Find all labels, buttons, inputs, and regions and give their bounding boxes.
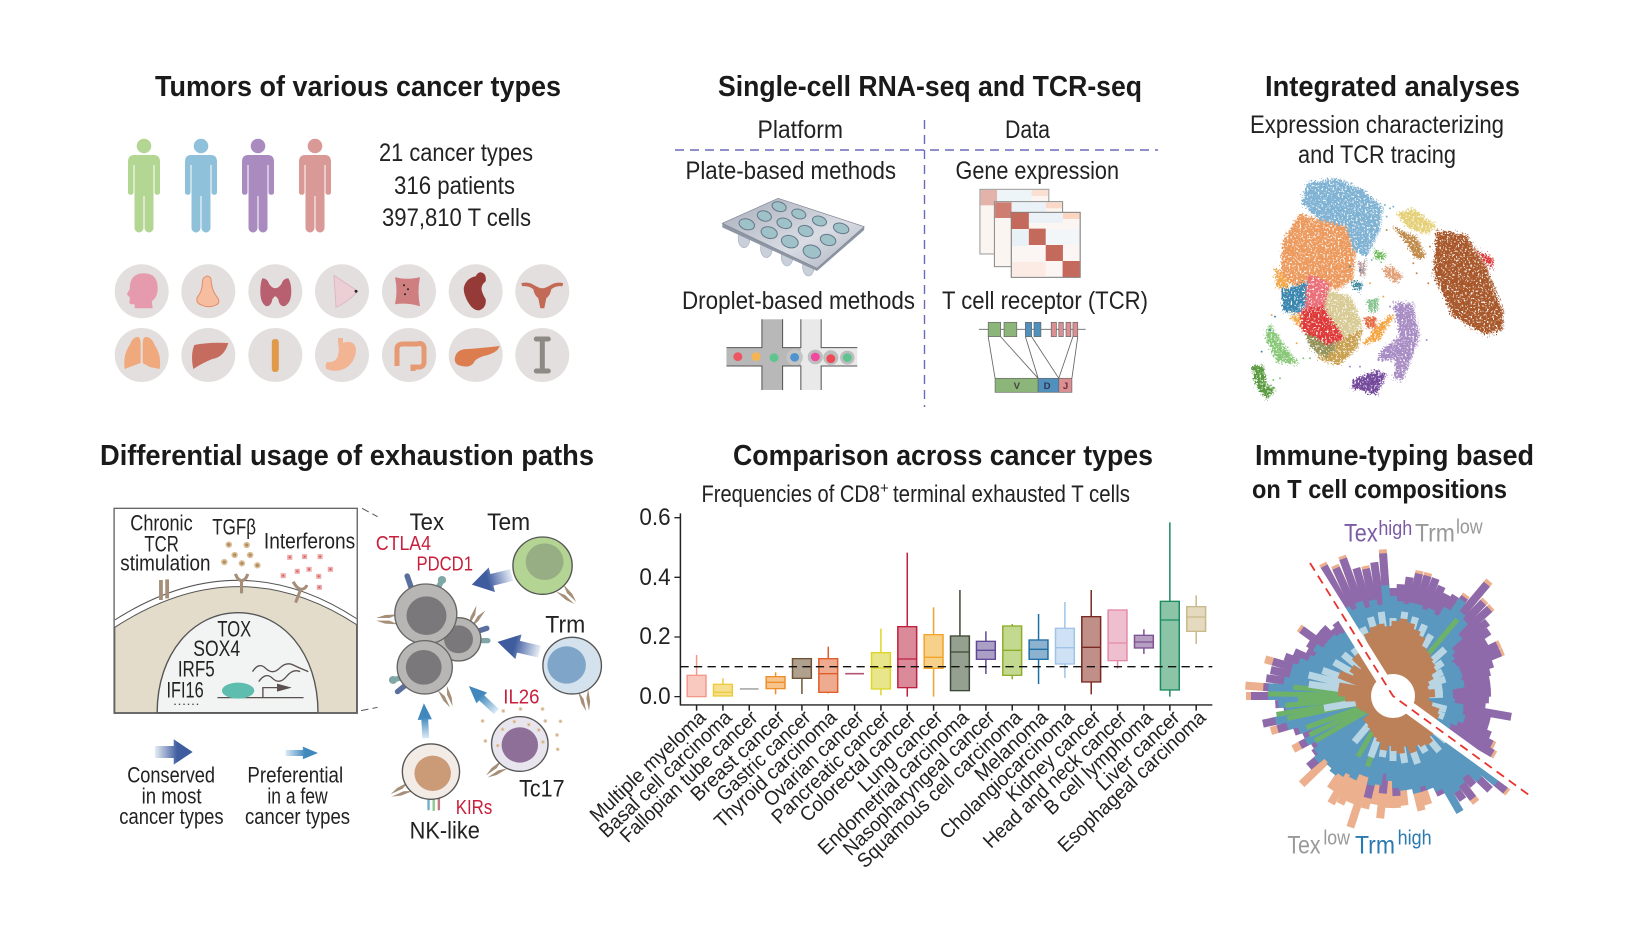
icon: TCR V D J recombination: V [1014,381,1021,392]
box: melanoma [1029,614,1048,684]
box: B cell lymphoma [1134,629,1153,654]
text: TOX: TOX [217,617,251,642]
text: data: Data [1005,116,1050,144]
chart: boxplots by cancer type [639,504,1212,711]
icon: transcription factor and gene [217,664,308,699]
icon: kidney [449,264,503,318]
axis labels: cancer types: Basal cell carcinoma [595,706,737,842]
axis labels: cancer types: Squamous cell carcinoma [853,706,1027,873]
arrow: Tem to Tex [469,563,515,597]
label: Tex: Tex [410,509,444,536]
panel: organ icons [115,264,569,382]
box: cholangiocarcinoma [1055,602,1074,678]
title: integrated analyses: Integrated analyses [1265,71,1520,103]
axis labels: cancer types: Cholangiocarcinoma [936,706,1079,844]
box: ovarian cancer [845,671,864,676]
axis labels: cancer types: Head and neck cancer [979,706,1132,853]
text: frequencies of CD8+ terminal exhausted T cells [702,480,1130,508]
text: conserved in most cancer types: cancer types [119,804,224,829]
text: expression characterizing and TCR tracing: and TCR tracing [1298,141,1456,169]
icon: TCR V D J recombination: J [1063,381,1068,392]
text: preferential in a few cancer types: cancer types [245,804,350,829]
text: chronic TCR stimulation: Chronic [130,511,193,536]
text: frequencies of CD8+ terminal exhausted T cells: + [880,480,889,497]
box: endometrial carcinoma [951,590,969,691]
label: PDCD1: PDCD1 [416,553,473,576]
icon: TGF beta molecules [222,542,260,568]
axis labels: cancer types: Esophageal carcinoma [1054,706,1211,857]
arrow: Trm to Tex [494,630,542,664]
label: NK-like: NK-like [410,818,480,844]
axis labels: cancer types: Breast cancer [687,706,790,806]
text: gene expression: Gene expression [956,157,1119,185]
icon: lungs [115,328,169,382]
text block: cohort counts: 316 patients [394,172,515,200]
label: Tc17: Tc17 [519,776,565,803]
icon: expression heatmaps [980,189,1080,277]
text: chronic TCR stimulation [120,511,211,576]
arrow: NK-like to Tex [417,703,433,739]
label: Tex high Trm low: high [1378,517,1412,540]
axis labels: cancer types: Kidney cancer [1002,706,1106,807]
title: immune-typing based on T cell compositions [1252,440,1534,504]
cell: Tc17 [481,708,562,781]
box: gastric cancer [793,659,811,694]
text: platform: Platform [758,116,843,144]
label: Tex low Trm high: Trm [1355,831,1395,859]
axis labels: cancer types: Melanoma [971,706,1053,786]
box: nasopharyngeal cancer [976,631,995,674]
box: breast cancer [766,672,785,694]
label: Tex high Trm low: low [1456,515,1483,538]
text: chronic TCR stimulation: stimulation [120,551,211,576]
box: head and neck cancer [1108,610,1127,669]
text: expression characterizing and TCR tracing: Expression characterizing [1250,111,1504,139]
icon: uterus [515,264,569,318]
chart: UMAP scatter clusters [1252,178,1503,399]
box: basal cell carcinoma [714,678,732,696]
title: single-cell RNA-seq and TCR-seq: Single-cell RNA-seq and TCR-seq [718,71,1142,103]
icon: liver [181,328,235,382]
icon: nose [181,264,235,318]
panel: patient figures [128,139,331,232]
box: pancreatic cancer [872,629,890,695]
icon: bile duct [248,328,302,382]
icon: purple person [242,139,274,232]
axis labels: cancer types: B cell lymphoma [1040,706,1158,820]
icon: blue person [185,139,217,232]
text: preferential in a few cancer types [245,763,350,829]
label: Tex low Trm high: low [1323,826,1350,849]
title: tumors of various cancer types: Tumors of various cancer types [155,71,561,103]
y axis labels: 0.2 [639,623,671,650]
axis labels: cancer types [586,706,1211,873]
chart: radial T cell composition bars [1245,548,1535,827]
text: preferential in a few cancer types: Preferential [247,763,343,787]
box: kidney cancer [1082,590,1101,694]
text: preferential in a few cancer types: in a few [267,784,328,808]
icon: breast [315,264,369,318]
nucleus [157,613,318,713]
title: differential usage of exhaustion paths: Differential usage of exhaustion paths [100,440,594,472]
icon: pink person [299,139,331,232]
arrow: Tc17 to Tex [464,681,502,717]
axis labels: cancer types: Pancreatic cancer [768,706,895,829]
box: thyroid carcinoma [819,647,838,693]
box: multiple myeloma [687,655,706,697]
axis labels: cancer types: Ovarian cancer [760,706,869,811]
box: colorectal cancer [898,553,917,697]
icon: colon [382,328,436,382]
cells: exhausted T cell cluster [376,576,488,709]
text: IRF5: IRF5 [178,657,215,682]
axis labels: cancer types: Lung cancer [854,706,948,797]
icon: TCR V D J recombination [979,322,1086,392]
legend: preferential arrow [286,747,318,759]
cell cytoplasm [115,587,357,713]
box: esophageal carcinoma [1187,595,1206,644]
text: conserved in most cancer types [119,763,224,829]
label: IL26: IL26 [503,686,539,708]
text: IFI16: IFI16 [166,678,204,703]
icon: TCR V D J recombination: D [1044,381,1051,392]
axis labels: cancer types: Multiple myeloma [586,706,711,827]
text: SOX4: SOX4 [193,636,240,661]
icon: droplet microfluidics [726,319,857,390]
text: conserved in most cancer types: in most [142,784,202,808]
cell: Tem [513,537,579,607]
y axis labels: 0.6 [639,504,671,531]
icon: bone [515,328,569,382]
panel: exhaustion paths cell inset [114,508,601,844]
label: Tex low Trm high: high [1398,826,1432,849]
text: frequencies of CD8+ terminal exhausted T cells: terminal exhausted T cells [893,481,1130,508]
box: lung cancer [924,607,943,697]
text: plate-based methods: Plate-based methods [686,157,896,185]
y axis labels [639,504,671,710]
cell: Trm [543,637,601,712]
text: interferons: Interferons [264,529,355,553]
label: Tex low Trm high: Tex [1287,831,1321,859]
cell: NK-like [389,744,460,810]
axis labels: cancer types: Fallopian tube cancer [616,706,763,847]
icon: head [115,264,169,318]
label: Trm: Trm [545,612,585,638]
label: Tex high Trm low: Trm [1415,520,1455,548]
icon: pancreas [449,328,503,382]
icon: multiwell plate [722,198,864,276]
text: chronic TCR stimulation: TCR [144,532,179,557]
text: droplet-based methods: Droplet-based methods [682,287,915,315]
icon: thyroid [248,264,302,318]
axis labels: cancer types: Nasopharyngeal cancer [839,706,1000,860]
icon: stomach [315,328,369,382]
box: squamous cell carcinoma [1003,624,1022,679]
label: Tex low Trm high [1287,826,1432,859]
axis labels: cancer types: Thyroid carcinoma [710,706,842,833]
y axis labels: 0.0 [639,683,671,710]
label: Tex high Trm low [1344,515,1483,548]
text block: cohort counts: 21 cancer types [379,139,533,167]
axis labels: cancer types: Colorectal cancer [796,706,921,827]
text: T cell receptor (TCR): T cell receptor (TCR) [942,287,1148,315]
legend: conserved arrow [155,739,193,765]
title: immune-typing based on T cell compositions: Immune-typing based [1255,440,1534,472]
axis labels: cancer types: Gastric cancer [713,706,816,806]
box: liver cancer [1160,522,1179,697]
text: conserved in most cancer types: Conserved [127,763,215,787]
text: frequencies of CD8+ terminal exhausted T cells: Frequencies of CD8 [702,481,880,508]
label: Tem: Tem [487,509,530,536]
icon: membrane receptors [161,574,307,603]
text block: cohort counts: 397,810 T cells [382,204,531,232]
text: TGF beta: TGFβ [212,515,256,539]
label: CTLA4: CTLA4 [376,532,431,555]
icon: interferon molecules [281,555,332,589]
title: comparison across cancer types: Comparison across cancer types [733,440,1153,472]
box: fallopian tube cancer [740,686,759,691]
axis labels: cancer types: Liver cancer [1092,706,1185,796]
text: expression characterizing and TCR tracing [1250,111,1504,169]
label: KIRs: KIRs [456,796,492,819]
icon: green person [128,139,160,232]
axis labels: cancer types: Endometrial carcinoma [814,706,974,860]
text block: cohort counts [379,139,533,232]
y axis labels: 0.4 [639,564,671,591]
label: Tex high Trm low: Tex [1344,520,1378,548]
icon: skin [382,264,436,318]
title: immune-typing based on T cell compositions: on T cell compositions [1252,474,1507,504]
